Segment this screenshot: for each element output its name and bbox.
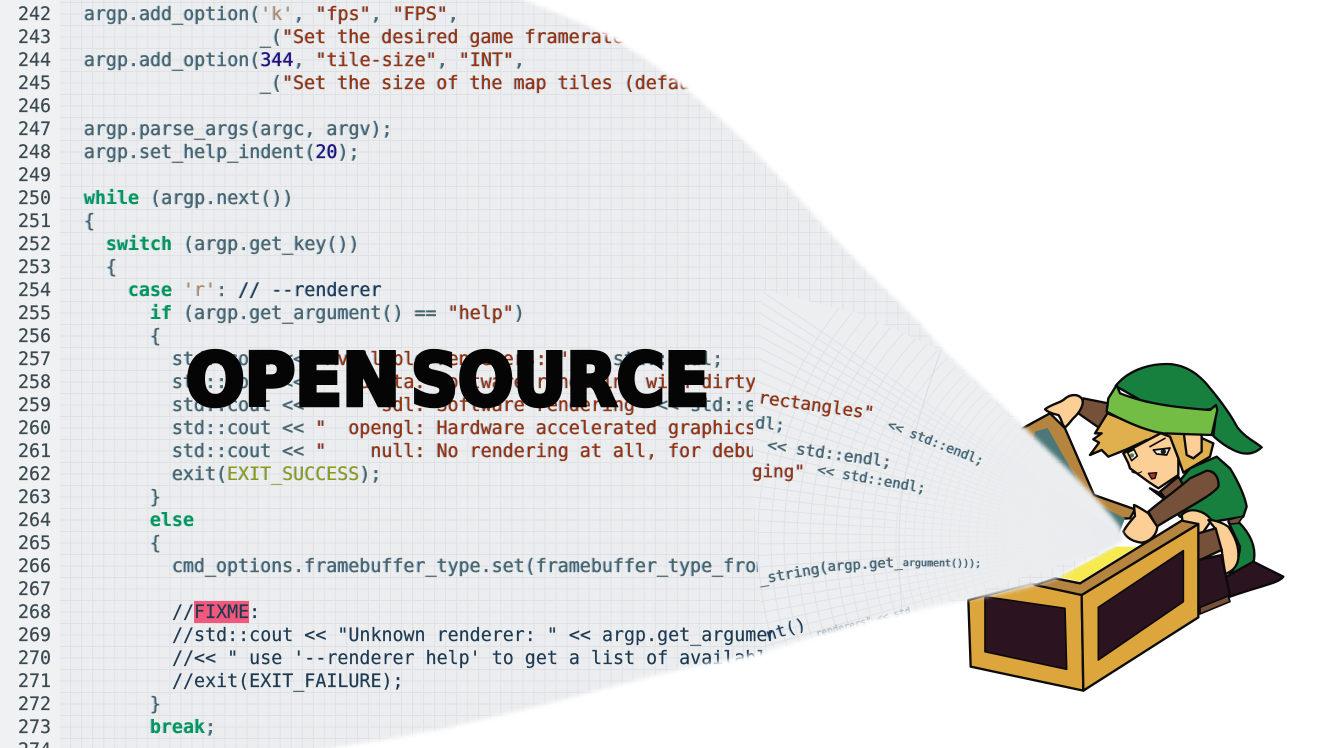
warped code fragments [752, 388, 986, 646]
boot cuff [1198, 528, 1222, 561]
syntax highlighted code: { [106, 257, 117, 278]
commented code: //exit(EXIT_FAILURE); [172, 671, 404, 692]
FIXME highlight [194, 601, 249, 623]
syntax highlighted code: switch (argp.get_key()) [106, 234, 360, 255]
warped code fragments: dl; [755, 413, 786, 435]
line numbers: 268 [18, 602, 51, 623]
hip [1227, 522, 1254, 578]
warped code fragments: ging" [752, 462, 805, 482]
flat code listing [83, 6, 772, 736]
syntax highlighted code: } [150, 694, 161, 715]
chest lid [1013, 413, 1135, 540]
warped code fragments: rectangles" [757, 388, 875, 424]
syntax highlighted code: std::cout << " opengl: Hardware accelerated graphics" [172, 418, 767, 439]
line numbers: 272 [18, 694, 51, 715]
line numbers: 248 [18, 142, 51, 163]
thigh crescent [1208, 520, 1238, 574]
syntax highlighted code: { [150, 326, 161, 347]
illustration: elf opening treasure chest [968, 364, 1283, 691]
syntax highlighted code: else [150, 510, 194, 531]
neck [1160, 477, 1183, 500]
line numbers: 249 [18, 165, 51, 186]
line numbers: 242 [18, 4, 51, 25]
line numbers: 250 [18, 188, 51, 209]
left arm sleeve [1078, 398, 1117, 427]
syntax highlighted code: if (argp.get_argument() == "help") [150, 303, 525, 324]
warped code fragments: _string( [758, 560, 829, 588]
line numbers: 270 [18, 648, 51, 669]
warped code fragments: << std::endl; [766, 435, 893, 471]
left hand [1045, 395, 1083, 427]
syntax highlighted code: std::cout << "Available renderers: " << std::endl; [172, 349, 723, 370]
syntax highlighted code: std::cout << " delta: Software rendering with dirty rectangles" [172, 372, 889, 393]
line numbers: 271 [18, 671, 51, 692]
line numbers: 245 [18, 73, 51, 94]
syntax highlighted code: argp.add_option('k', "fps", "FPS", [84, 4, 459, 25]
line numbers: 254 [18, 280, 51, 301]
line numbers: 262 [18, 464, 51, 485]
syntax highlighted code: cmd_options.framebuffer_type.set(framebuffer_type_from_string [172, 556, 845, 577]
boot sole [1200, 596, 1230, 614]
title: OPEN SOURCE: SOURCE [411, 338, 709, 422]
front foot [1223, 562, 1283, 597]
line numbers: 263 [18, 487, 51, 508]
syntax highlighted code: case 'r': // --renderer [128, 280, 382, 301]
line numbers: 273 [18, 717, 51, 738]
syntax highlighted code: exit(EXIT_SUCCESS); [172, 464, 382, 485]
eyes and mouth [1128, 438, 1170, 479]
face [1123, 433, 1178, 488]
line numbers: 261 [18, 441, 51, 462]
title: OPEN SOURCE [186, 338, 709, 422]
hair [1090, 413, 1213, 473]
hat [1116, 364, 1262, 454]
chest body [968, 521, 1198, 691]
belt [1228, 516, 1243, 524]
line numbers: 247 [18, 119, 51, 140]
warped code fragments: renderers" << std [815, 606, 912, 640]
syntax highlighted code: argp.add_option(344, "tile-size", "INT", [84, 50, 525, 71]
line numbers [18, 4, 51, 748]
line numbers: 265 [18, 533, 51, 554]
line numbers: 266 [18, 556, 51, 577]
commented code: //FIXME: [172, 602, 260, 623]
hat band [1107, 385, 1217, 435]
line numbers: 267 [18, 579, 51, 600]
line numbers: 260 [18, 418, 51, 439]
commented code: //<< " use '--renderer help' to get a list of available [172, 648, 778, 669]
warped code fragments: argp.get_ [827, 554, 904, 575]
line numbers: 244 [18, 50, 51, 71]
syntax highlighted code: argp.parse_args(argc, argv); [84, 119, 393, 140]
syntax highlighted code: std::cout << " sdl: Software rendering" << std::endl; [172, 395, 800, 416]
syntax highlighted code: argp.set_help_indent(20); [84, 142, 360, 163]
right arm sleeve [1148, 471, 1218, 527]
boot [1198, 555, 1230, 609]
line numbers: 264 [18, 510, 51, 531]
fade toward chest [968, 431, 1121, 588]
line numbers: 258 [18, 372, 51, 393]
syntax highlighted code: std::cout << " null: No rendering at all, for debugging" [172, 441, 822, 462]
commented code: //std::cout << "Unknown renderer: " << argp.get_argument [172, 625, 789, 646]
syntax highlighted code: _("Set the desired game framerate (default: 60)" [260, 27, 789, 48]
right hand [1123, 505, 1157, 543]
syntax highlighted code: } [150, 487, 161, 508]
warped grid [752, 292, 971, 648]
line numbers: 243 [18, 27, 51, 48]
line numbers: 269 [18, 625, 51, 646]
syntax highlighted code: while (argp.next()) [84, 188, 294, 209]
line numbers: 255 [18, 303, 51, 324]
warped code fragments: nt() [764, 615, 809, 646]
title: OPEN SOURCE: OPEN [186, 338, 400, 422]
line numbers: 246 [18, 96, 51, 117]
line numbers: 257 [18, 349, 51, 370]
line numbers: 259 [18, 395, 51, 416]
warped code fragments: << std::endl; [886, 418, 986, 469]
syntax highlighted code: { [150, 533, 161, 554]
line numbers: 251 [18, 211, 51, 232]
line numbers: 253 [18, 257, 51, 278]
warped code fragments: argument())); [903, 558, 981, 570]
warped code fragments: << std::endl; [816, 462, 927, 497]
syntax highlighted code [83, 6, 758, 736]
syntax highlighted code: _("Set the size of the map tiles (default: 32)" [260, 73, 778, 94]
line numbers: 256 [18, 326, 51, 347]
line numbers: 252 [18, 234, 51, 255]
syntax highlighted code: { [84, 211, 95, 232]
warped code panel [752, 290, 1120, 648]
ear [1184, 416, 1202, 458]
upper thigh [1182, 510, 1212, 537]
tunic [1150, 457, 1247, 523]
commented code [172, 602, 789, 692]
line number gutter [0, 0, 60, 748]
editor grid [60, 0, 1104, 748]
syntax highlighted code: break; [150, 717, 216, 738]
